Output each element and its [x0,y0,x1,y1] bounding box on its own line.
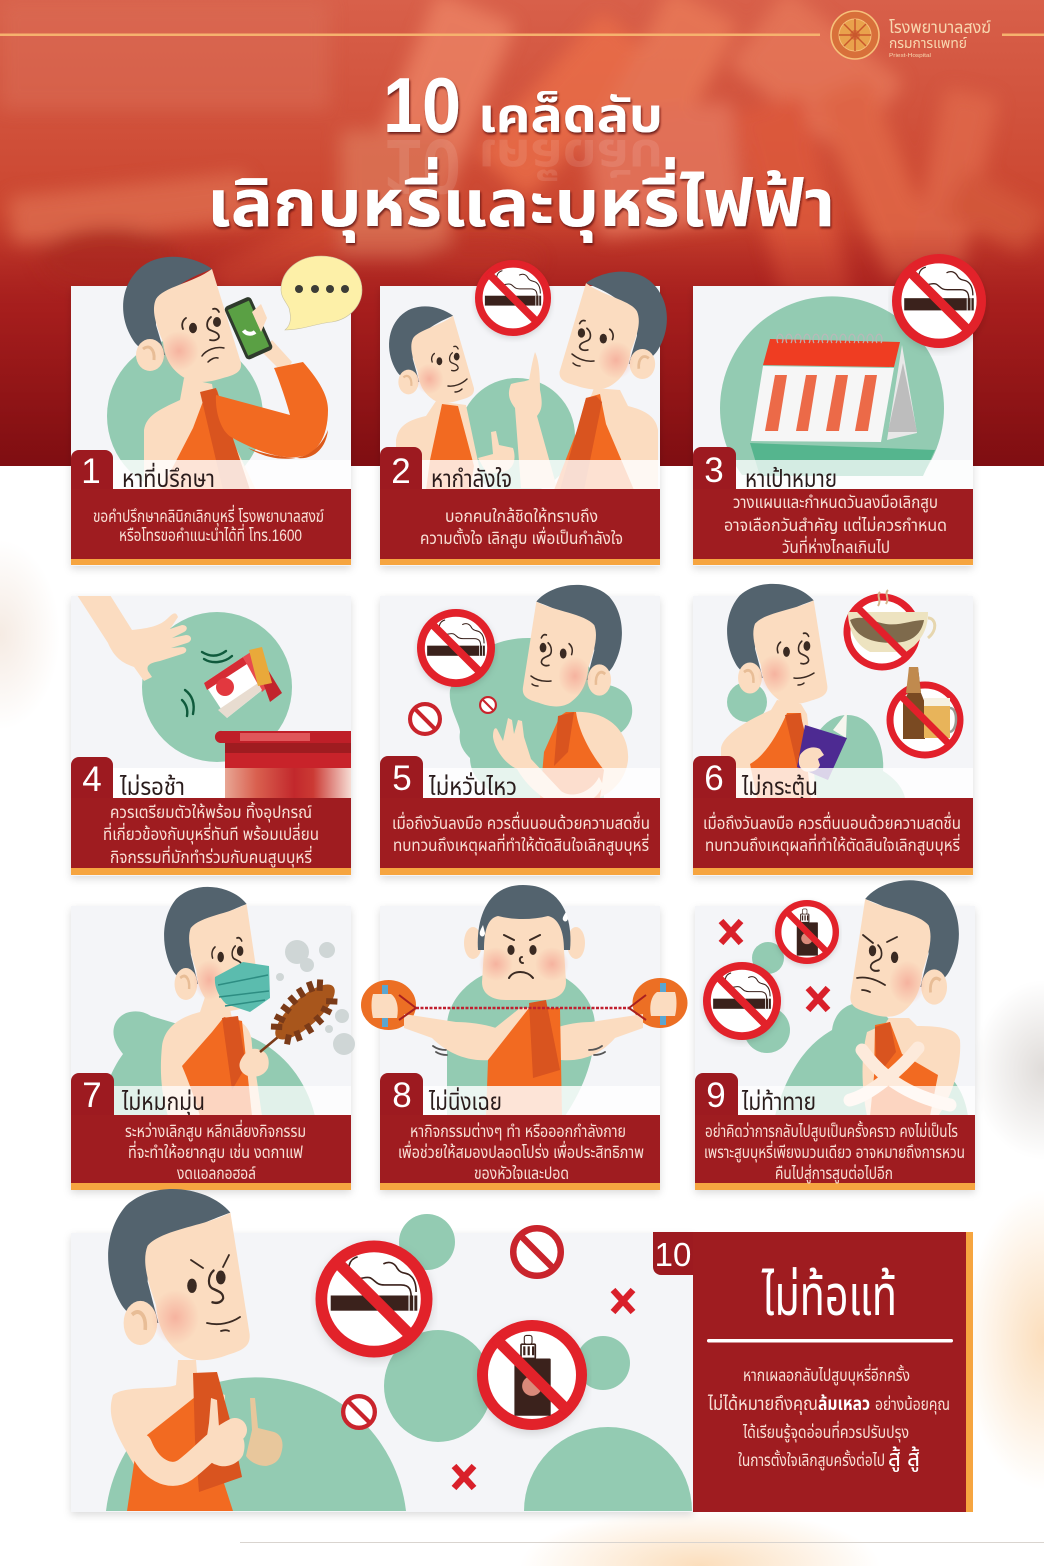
text band: ความตั้งใจ เลิกสูบ เพื่อเป็นกำลังใจ [420,526,623,550]
text band: ระหว่างเลิกสูบ หลีกเลี่ยงกิจกรรม [125,1119,306,1143]
text band: เมื่อถึงวันลงมือ ควรตื่นนอนด้วยความสดชื่น [703,811,961,833]
title [207,61,835,243]
illustration: monk crossing arms [744,880,968,1116]
heading label [380,756,660,801]
icon: red x bottom [454,1466,474,1488]
heading label: 5 [392,759,412,798]
icon: calendar [751,334,917,442]
heading label: หากำลังใจ [431,466,512,493]
logo: Priest Hospital: Priest-Hospital [889,53,931,59]
heading label: หาเป้าหมาย [745,466,837,493]
heading label: 6 [704,759,724,798]
green circles [106,1214,692,1511]
icon: no alcohol [890,667,960,755]
text panel: ล้มเหลว [818,1393,870,1415]
panel: 5 ไม่หวั่นไหว [380,585,660,876]
heading label [71,450,351,493]
panel: 8 ไม่นิ่งเฉย [361,885,688,1190]
heading label: ไม่หวั่นไหว [428,771,517,801]
text panel [653,1232,973,1512]
heading label [695,1073,975,1116]
icon: speech bubble [281,256,362,330]
panel: 1 หาที่ปรึกษา [71,256,362,566]
text band: อย่าคิดว่าการกลับไปสูบเป็นครั้งคราว คงไม่เป็นไร [705,1120,958,1143]
icon: no smoking [421,613,491,683]
text band [693,798,973,875]
heading label: ไม่นิ่งเฉย [428,1086,502,1116]
text band: กิจกรรมที่มักทำร่วมกับคนสูบบุหรี่ [110,845,312,869]
text band: วันที่ห่างไกลเกินไป [782,535,890,557]
text band: ของหัวใจและปอด [474,1164,569,1183]
illustration: monk with praying hands [450,585,632,807]
text band: ทบทวนถึงเหตุผลที่ทำให้ตัดสินใจเลิกสูบบุหรี่ [393,833,649,857]
illustration: monk thumbs up [108,1189,283,1511]
text band: เพื่อช่วยให้สมองปลอดโปร่ง เพื่อประสิทธิภาพ [398,1140,644,1162]
text band: ควรเตรียมตัวให้พร้อม ทิ้งอุปกรณ์ [110,801,312,823]
text band: เมื่อถึงวันลงมือ ควรตื่นนอนด้วยความสดชื่น [392,811,650,833]
icon: no smoking [707,966,777,1036]
text band [71,489,351,565]
heading label [380,1073,660,1116]
green circle [720,296,944,475]
text band: หากิจกรรมต่างๆ ทำ หรือออกกำลังกาย [410,1122,626,1141]
icon: red x middle [808,988,828,1010]
text band [380,798,660,875]
text band [693,489,973,565]
heading label: ไม่รอช้า [119,773,185,801]
panel: 6 ไม่กระตุ้น [693,584,973,876]
logo: Priest Hospital [831,11,991,59]
heading label: ไม่หมกมุ่น [121,1088,205,1117]
panel: 2 หากำลังใจ [380,264,667,566]
panel: 7 ไม่หมกมุ่น [71,887,355,1190]
title: เลิกบุหรี่และบุหรี่ไฟฟ้า [207,157,835,243]
illustration: monk on phone [107,257,328,494]
text band: ทบทวนถึงเหตุผลที่ทำให้ตัดสินใจเลิกสูบบุหรี่ [705,833,960,857]
text band: ที่จะทำให้อยากสูบ เช่น งดกาแฟ [128,1140,303,1164]
text band [380,1115,660,1190]
text panel: ไม่ท้อแท้ [761,1264,897,1327]
text panel: ได้เรียนรู้จุดอ่อนที่ควรปรับปรุง [742,1420,909,1444]
text band: ที่เกี่ยวข้องกับบุหรี่ทันที พร้อมเปลี่ยน [103,822,319,845]
icon: no coffee [847,590,935,667]
text band: ขอคำปรึกษาคลินิกเลิกบุหรี่ โรงพยาบาลสงฆ์ [93,504,324,527]
icon: red x right [613,1290,633,1312]
text band: คืนไปสู่การสูบต่อไปอีก [775,1164,893,1185]
heading label: หาที่ปรึกษา [122,462,215,493]
text panel: หากเผลอกลับไปสูบบุหรี่อีกครั้ง [743,1363,910,1387]
heading label: ไม่กระตุ้น [741,773,818,802]
text panel: สู้ สู้ [888,1445,920,1473]
heading label: 7 [82,1076,102,1115]
illustration: monk exercising [361,885,688,1116]
title: 10 [383,123,461,211]
footer rule [240,1542,1044,1543]
icon: prohibition sign top [513,1228,561,1276]
text band [71,1115,351,1190]
icon: prohibition sign small [343,1396,375,1428]
text band: งดแอลกอฮอล์ [177,1164,256,1183]
icon: no vape [778,903,836,961]
text panel: ไม่ได้หมายถึงคุณ [707,1392,818,1415]
heading label: 4 [82,760,102,799]
heading label [71,1073,351,1117]
title: 10 [383,61,461,149]
icon: no vape large [482,1326,582,1424]
panel: 9 ไม่ท้าทาย [695,880,975,1190]
text band: เพราะสูบบุหรี่เพียงมวนเดียว อาจหมายถึงการหวน [704,1140,965,1164]
icon: dust particles [276,940,355,1055]
icon: red x top [721,921,741,943]
header rule [0,34,1044,36]
icon: prohibition sign small [480,697,496,713]
text band: บอกคนใกล้ชิดให้ทราบถึง [445,506,598,526]
text panel: อย่างน้อยคุณ [875,1394,950,1415]
title: เคล็ดลับ [478,129,663,182]
panel: 10 ไม่ท้อแท้ [71,1189,973,1512]
text band [695,1115,975,1190]
illustration: two monks talking [389,272,667,494]
panel: 3 หาเป้าหมาย [693,259,981,566]
heading label [380,447,660,493]
text band: วางแผนและกำหนดวันลงมือเลิกสูบ [733,493,938,514]
icon: no smoking large [321,1246,427,1352]
icon: prohibition sign large [410,704,440,734]
title: เคล็ดลับ [478,90,663,143]
text band: หรือโทรขอคำแนะนำได้ที่ โทร.1600 [119,523,302,545]
calendar shadow [750,443,935,476]
illustration: hand throwing pack into bin [78,596,351,768]
heading label [693,756,973,802]
heading label: 3 [704,451,724,490]
text band: อาจเลือกวันสำคัญ แต่ไม่ควรกำหนด [724,516,947,535]
heading label: 2 [391,452,411,491]
text panel: 10 [655,1236,691,1273]
text band [380,489,660,565]
icon: no smoking [479,264,547,332]
heading label: ไม่ท้าทาย [741,1088,816,1116]
text band [71,798,351,875]
heading label: 1 [81,452,101,491]
logo: Priest Hospital: โรงพยาบาลสงฆ์ [889,18,991,37]
logo: Priest Hospital: กรมการแพทย์ [889,35,967,51]
panel: 4 ไม่รอช้า [71,595,351,876]
heading label: 8 [392,1076,412,1115]
heading label [71,757,351,801]
text panel: ในการตั้งใจเลิกสูบครั้งต่อไป [738,1449,885,1472]
illustration: monk with mask and duster [99,887,347,1116]
illustration: monk reading a book [721,584,905,798]
heading label: 9 [706,1076,726,1115]
icon: no smoking [897,259,981,343]
heading label [693,447,973,493]
